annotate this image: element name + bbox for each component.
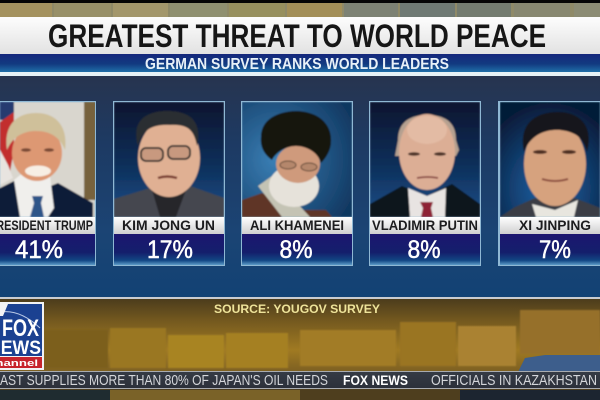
name label: KIM JONG UN [122, 217, 215, 233]
bottom studio strip [0, 388, 600, 400]
card: Vladimir Putin [369, 101, 481, 266]
percentage [500, 234, 600, 265]
card: Ali Khamenei [241, 101, 353, 266]
blue infographic panel [0, 76, 600, 298]
percentage: 8% [408, 236, 440, 264]
portrait: Kim [114, 102, 224, 217]
source strip [0, 297, 600, 372]
subtitle band: GERMAN SURVEY RANKS WORLD LEADERS [145, 56, 449, 73]
card: President Trump [0, 101, 96, 266]
portrait: Trump [0, 102, 96, 217]
percentage [114, 234, 224, 265]
percentage: 41% [15, 236, 63, 264]
source strip: SOURCE: YOUGOV SURVEY [214, 302, 380, 316]
name label [500, 217, 600, 234]
studio background: top [0, 0, 600, 18]
news ticker: AST SUPPLIES MORE THAN 80% OF JAPAN'S OIL NEEDS [0, 372, 328, 389]
portrait: Xi [500, 102, 600, 217]
Fox News Channel logo: FOX [2, 315, 39, 342]
percentage: 7% [539, 236, 571, 264]
subtitle band [0, 54, 600, 76]
percentage [0, 234, 95, 265]
percentage: 8% [280, 236, 312, 264]
news ticker [0, 371, 600, 389]
portrait: Khamenei [242, 102, 352, 217]
ticker logo: FOX NEWS [343, 372, 408, 388]
percentage: 17% [147, 236, 193, 264]
percentage [242, 234, 352, 265]
card: Kim Jong Un [113, 101, 225, 266]
Fox News Channel logo [0, 302, 44, 370]
card: Xi Jinping [498, 101, 600, 266]
name label: XI JINPING [519, 217, 591, 233]
percentage [370, 234, 480, 265]
portrait: Putin [370, 102, 480, 217]
name label: VLADIMIR PUTIN [372, 217, 478, 233]
name label: ALI KHAMENEI [250, 217, 344, 233]
